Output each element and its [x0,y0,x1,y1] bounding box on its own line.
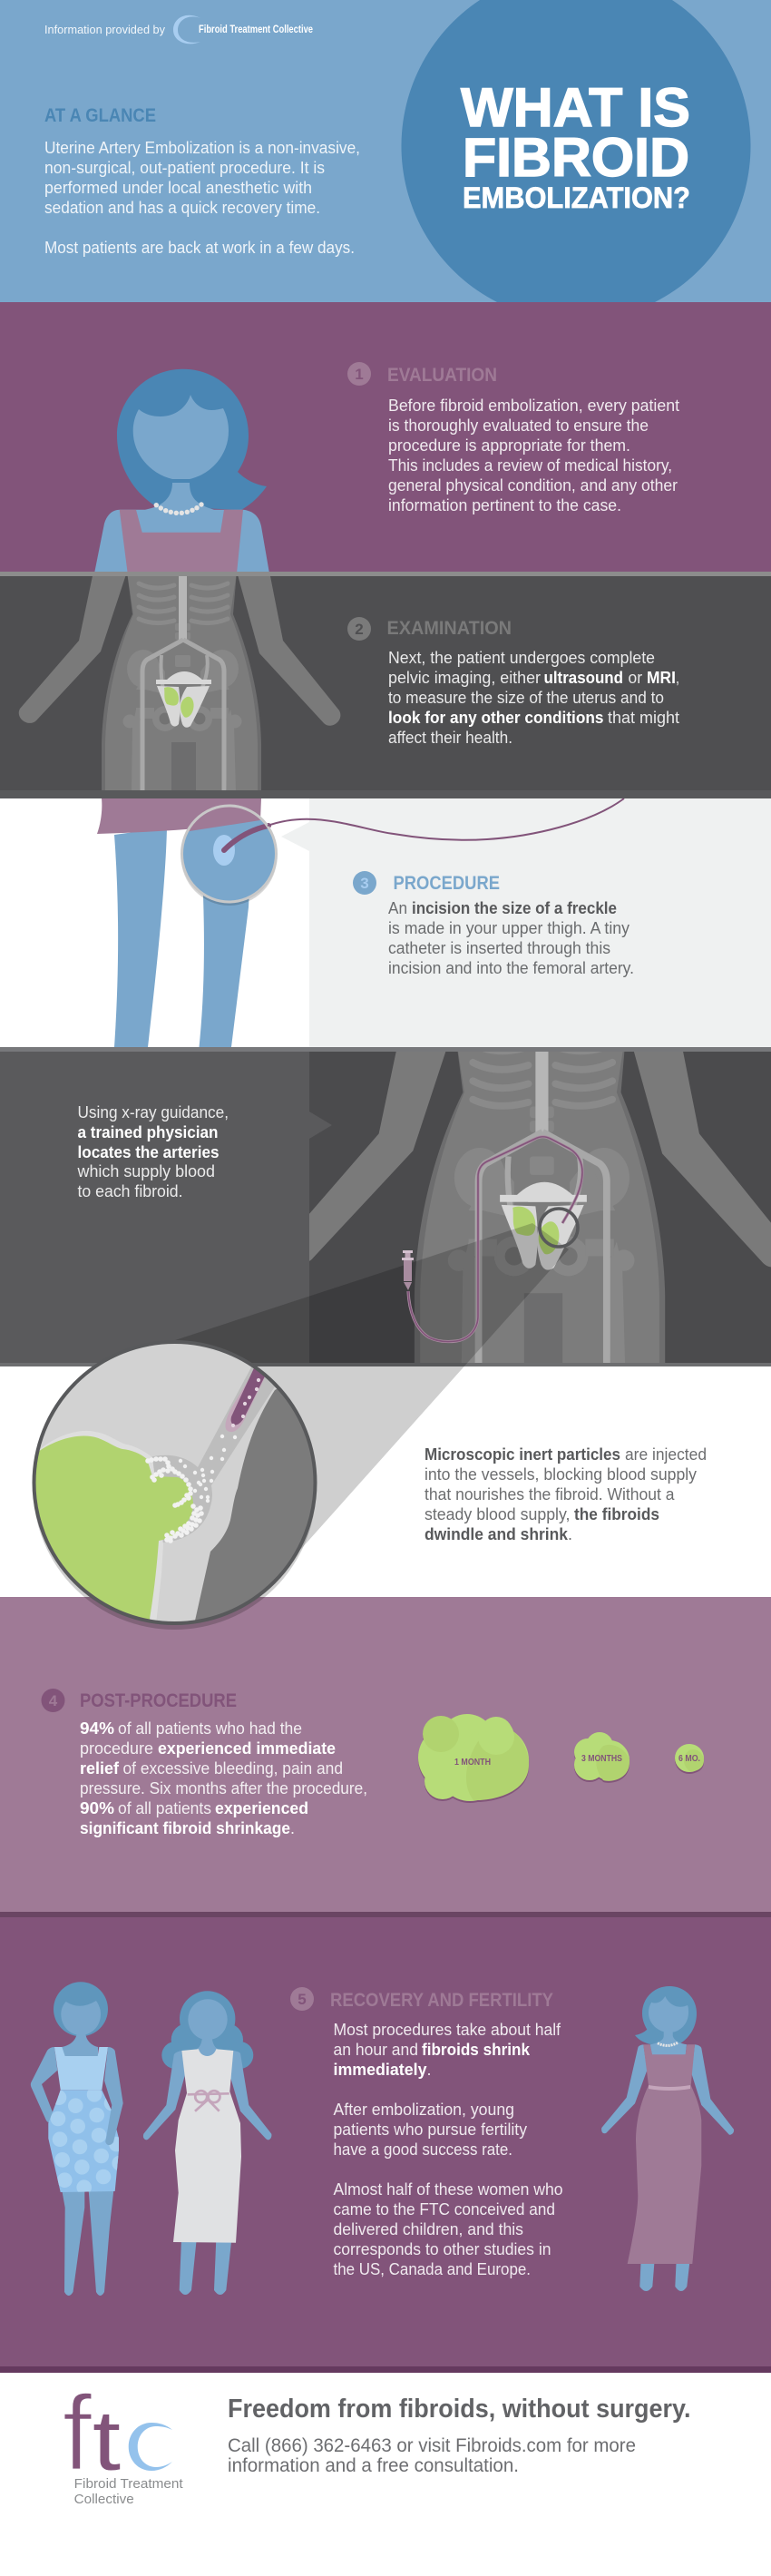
band: dividers [0,572,771,1366]
text block: post-procedure: pressure. Six months after the procedure, [80,1779,367,1797]
title circle [401,0,751,302]
text block: examination: ultrasound [544,669,623,687]
figure: x-ray body [19,572,340,794]
text block: guidance: to each fibroid. [78,1182,183,1200]
chart: fibroid at 6 months [675,1744,704,1772]
text block: post-procedure: of all patients [118,1799,211,1817]
text block: recovery: came to the FTC conceived and [334,2200,555,2218]
title: WHAT IS [461,77,690,138]
text block: particles: are injected [625,1445,707,1464]
text block: procedure: catheter is inserted through this [388,939,610,957]
figure: woman with polka dot skirt [31,1982,127,2296]
chart: fibroid at 3 months: 3 MONTHS [581,1753,622,1764]
text block: particles: the fibroids [574,1505,659,1523]
particles [145,1435,237,1543]
text block: procedure: is made in your upper thigh. A tiny [388,919,629,937]
attribution line [44,15,313,44]
text block: recovery: the US, Canada and Europe. [334,2260,531,2278]
text block: particles: steady blood supply, [425,1505,570,1523]
text block: at a glance [44,139,360,257]
text block: call to action: information and a free consultation. [228,2455,519,2476]
step 4 heading: POST-PROCEDURE [80,1690,237,1711]
title: EMBOLIZATION? [463,181,690,214]
text block: procedure: incision and into the femoral artery. [388,959,634,977]
text block: post-procedure: significant fibroid shrinkage [80,1819,290,1837]
text block: post-procedure: . [290,1819,295,1837]
panel: header [0,0,771,302]
chart: fibroid at 3 months [574,1732,629,1781]
text block: examination: that might [608,709,679,727]
attribution line: Information provided by [44,23,165,36]
figure: woman head and shoulders [94,369,269,573]
syringe and catheter tube [402,1137,582,1342]
text block: post-procedure: experienced [215,1799,308,1817]
text block: evaluation: This includes a review of medical history, [388,456,672,475]
text block: at a glance: non-surgical, out-patient procedure. It is [44,159,325,177]
step 4 heading: 4 [49,1692,58,1709]
figure: woman with purple dress [601,1986,734,2291]
text block: recovery: corresponds to other studies in [334,2240,551,2258]
text block: recovery: immediately [334,2061,426,2079]
panel: x-ray guidance [0,1052,771,1363]
step 1 heading: EVALUATION [387,365,497,386]
text block: post-procedure: procedure [80,1739,153,1758]
text block: guidance [77,1103,229,1200]
ring: selected fibroid [540,1209,578,1247]
step 3 heading [353,871,500,895]
figure: woman with white dress [143,1991,271,2295]
text block: examination: to measure the size of the uterus and to [388,689,664,707]
text block: guidance: which supply blood [77,1162,215,1180]
text block: post-procedure: relief [80,1759,120,1778]
text block: recovery: Most procedures take about half [334,2021,561,2039]
text block: examination: MRI [647,669,676,687]
logo: ftc: Fibroid Treatment [74,2476,184,2492]
text block: examination: affect their health. [388,729,512,747]
text block: particles: . [568,1525,572,1543]
text block: evaluation: information pertinent to the case. [388,496,621,514]
text block: post-procedure: of excessive bleeding, pain and [123,1759,343,1778]
text block: evaluation: Before fibroid embolization, every patient [388,397,679,415]
text block: recovery [334,2021,562,2278]
step 5 heading: RECOVERY AND FERTILITY [330,1990,553,2011]
text block: post-procedure: 90% [80,1799,114,1817]
icon: magnified incision [177,803,281,907]
panel: recovery and fertility [0,1917,771,2373]
text block: examination: look for any other conditions [388,709,604,727]
step 5 heading [290,1987,553,2011]
text block: post-procedure: 94% [80,1719,114,1738]
necklace [154,502,204,515]
magnified view: particles blocking fibroid [27,1342,327,1630]
panel: procedure [97,798,771,1047]
step 2 heading [347,617,512,641]
text block: at a glance: sedation and has a quick recovery time. [44,199,320,217]
text block: particles [425,1445,707,1543]
text block: post-procedure [80,1719,367,1837]
panel: post-procedure [0,1597,771,1917]
text block: recovery: fibroids shrink [422,2041,531,2059]
logo: ftc: Collective [74,2492,134,2507]
step 4 heading [42,1689,237,1712]
logo: ftc: t [93,2393,121,2488]
text block: recovery: . [426,2061,432,2079]
hair [161,1991,253,2069]
step 2 heading: EXAMINATION [386,618,512,639]
panel: footer [0,2373,771,2576]
text block: evaluation [388,397,679,514]
text block: evaluation: procedure is appropriate for them. [388,436,630,455]
chart: fibroid at 6 months: 6 MO. [678,1753,700,1764]
title [461,77,690,214]
text block: at a glance: Uterine Artery Embolization is a non-invasive, [44,139,360,157]
text block: at a glance: Most patients are back at work in a few days. [44,239,355,257]
text block: recovery: Almost half of these women who [334,2180,562,2199]
text block: evaluation: general physical condition, and any other [388,476,678,495]
text block: post-procedure: experienced immediate [158,1739,336,1758]
text block: guidance: locates the arteries [78,1143,220,1161]
text block: evaluation: is thoroughly evaluated to ensure the [388,416,649,435]
chart: fibroid at 1 month [418,1714,529,1801]
logo: ftc [62,2374,184,2507]
step 3 heading: PROCEDURE [394,873,500,894]
text block: particles: that nourishes the fibroid. Without a [425,1485,675,1503]
text block: recovery: an hour and [334,2041,418,2059]
text block: recovery: After embolization, young [334,2101,514,2119]
panel: evaluation [0,302,771,573]
text block: particles: dwindle and shrink [425,1525,569,1543]
attribution line: Fibroid Treatment Collective [199,24,313,35]
text block: call to action: Call (866) 362-6463 or visit Fibroids.com for more [228,2435,636,2456]
text block: recovery: delivered children, and this [334,2220,523,2238]
text block: post-procedure: of all patients who had the [118,1719,302,1738]
text block: procedure: An [388,899,407,917]
text block: call to action [228,2435,636,2476]
chart: fibroid at 1 month: 1 MONTH [454,1757,491,1768]
text block: procedure: incision the size of a freckle [412,899,617,917]
panel: particles [0,1366,771,1597]
figure: skirt and legs [97,798,261,1047]
zoom cone and catheter [172,1137,582,1549]
text block: procedure [388,899,634,977]
text block: examination: Next, the patient undergoes complete [388,649,655,667]
text block: recovery: have a good success rate. [334,2140,512,2159]
text block: at a glance: performed under local anesthetic with [44,179,312,197]
text block: examination [388,649,679,747]
text block: recovery: patients who pursue fertility [334,2121,527,2139]
step 1 heading [347,362,497,386]
step 3 heading: 3 [360,875,369,892]
bow [188,2091,229,2111]
figure: x-ray body with catheter [309,1052,771,1363]
step 2 heading: 2 [355,621,364,638]
text block: particles: Microscopic inert particles [425,1445,620,1464]
text block: guidance: Using x-ray guidance, [78,1103,229,1121]
heading: at a glance: AT A GLANCE [44,105,156,126]
logo: ftc: f [62,2374,93,2493]
text block: particles: into the vessels, blocking blood supply [425,1465,697,1484]
title: FIBROID [463,127,689,188]
catheter line [268,798,624,840]
text block: guidance: a trained physician [78,1123,218,1141]
step 5 heading: 5 [298,1991,307,2008]
panel: examination [0,572,771,794]
heading: freedom from fibroids: Freedom from fibroids, without surgery. [228,2395,691,2424]
text block: examination: , [676,669,679,687]
text block: examination: or [628,669,642,687]
text block: examination: pelvic imaging, either [388,669,541,687]
step 1 heading: 1 [355,366,364,383]
